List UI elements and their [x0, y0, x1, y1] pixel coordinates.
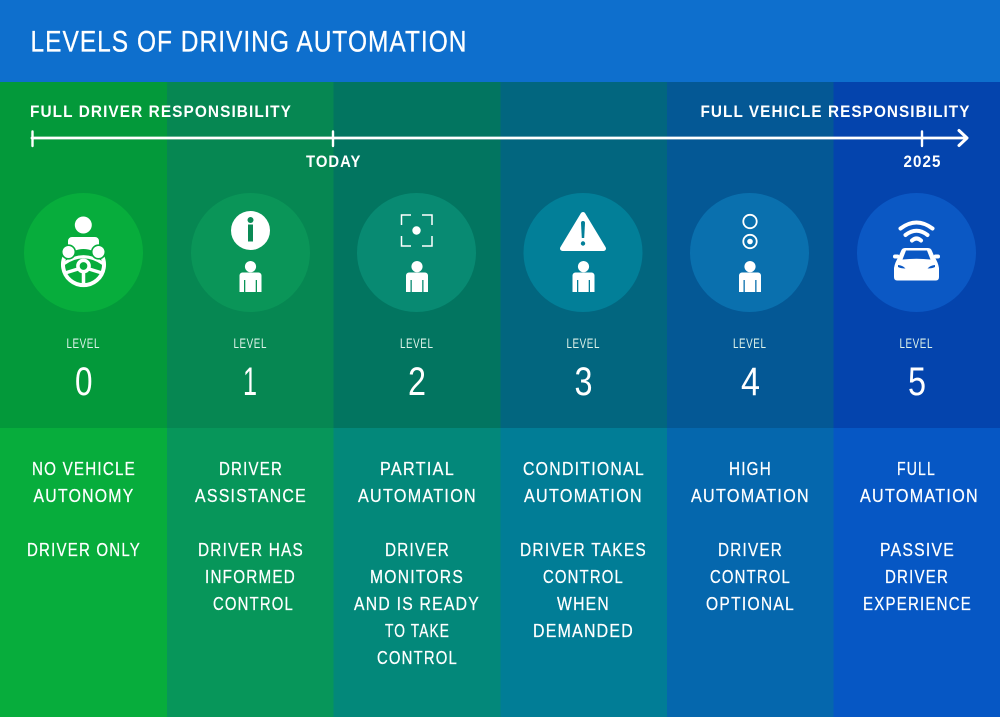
- text: level 3 description: CONTROL: [543, 566, 624, 587]
- icon: status lights and driver: [690, 193, 809, 312]
- text: level 3 description: CONDITIONAL: [523, 458, 645, 479]
- text: level 3 description: WHEN: [557, 593, 610, 614]
- text: number 4: 4: [741, 360, 760, 404]
- text: level 0 description: AUTONOMY: [34, 485, 134, 506]
- panel: level 2: [354, 193, 480, 668]
- text: level 2 description: MONITORS: [370, 566, 464, 587]
- text: level 3 description: AUTOMATION: [524, 485, 643, 506]
- timeline: [30, 103, 970, 171]
- text: level 2 label: LEVEL: [400, 336, 434, 351]
- text: level 2 description: PARTIAL: [380, 458, 455, 479]
- text: level 3 label: LEVEL: [566, 336, 600, 351]
- text: level 2 description: AND IS READY: [354, 593, 480, 614]
- text: level 1 description: DRIVER HAS: [198, 539, 304, 560]
- text: level 3 description: [520, 458, 647, 641]
- text: number 2: 2: [408, 360, 426, 404]
- title: LEVELS OF DRIVING AUTOMATION: [30, 26, 468, 58]
- text: level 2 description: AUTOMATION: [358, 485, 477, 506]
- text: level 4 description: CONTROL: [710, 566, 791, 587]
- text: level 0 description: [27, 458, 141, 560]
- text: number 1: 1: [243, 360, 257, 404]
- panel: level 0: [24, 193, 143, 560]
- text: level 1 description: INFORMED: [205, 566, 296, 587]
- text: level 1 description: CONTROL: [213, 593, 294, 614]
- text: level 2 description: TO TAKE: [385, 620, 450, 641]
- text: level 5 description: FULL: [897, 458, 936, 479]
- text: level 5 description: AUTOMATION: [860, 485, 979, 506]
- text: level 3 description: DRIVER TAKES: [520, 539, 647, 560]
- panel: level 3: [520, 193, 647, 641]
- panel: level 4: [690, 193, 810, 614]
- text: level 0 description: NO VEHICLE: [32, 458, 136, 479]
- text: level 1 description: DRIVER: [219, 458, 283, 479]
- icon: warning triangle and driver: [524, 193, 642, 312]
- icon: connected car: [857, 193, 976, 312]
- text: level 2 description: CONTROL: [377, 647, 458, 668]
- text: level 2 description: DRIVER: [385, 539, 450, 560]
- text: level 4 description: AUTOMATION: [691, 485, 810, 506]
- icon: driver at steering wheel: [24, 193, 143, 312]
- panel: level 1: [191, 193, 310, 614]
- text: level 0 description: DRIVER ONLY: [27, 539, 141, 560]
- label: today: TODAY: [306, 153, 362, 171]
- panel: level 5: [857, 193, 979, 614]
- text: level 5 description: [860, 458, 979, 614]
- text: level 5 label: LEVEL: [900, 336, 933, 351]
- text: level 4 description: OPTIONAL: [706, 593, 795, 614]
- text: level 0 label: LEVEL: [66, 336, 100, 351]
- text: level 1 description: ASSISTANCE: [195, 485, 307, 506]
- text: level 2 description: [354, 458, 480, 668]
- icon: sensing frame and driver: [357, 193, 476, 312]
- text: level 1 description: [195, 458, 307, 614]
- text: level 4 description: [691, 458, 810, 614]
- icon: information and driver: [191, 193, 310, 312]
- arrow: timeline axis: [32, 130, 967, 146]
- text: level 4 description: DRIVER: [718, 539, 783, 560]
- text: level 3 description: DEMANDED: [533, 620, 634, 641]
- label: 2025: 2025: [904, 153, 942, 171]
- heading: full vehicle responsibility: FULL VEHICLE RESPONSIBILITY: [700, 103, 970, 121]
- text: level 5 description: DRIVER: [885, 566, 949, 587]
- text: level 5 description: EXPERIENCE: [863, 593, 972, 614]
- text: number 5: 5: [908, 360, 926, 404]
- text: level 4 label: LEVEL: [733, 336, 766, 351]
- text: number 0: 0: [75, 360, 92, 404]
- text: level 4 description: HIGH: [729, 458, 772, 479]
- text: number 3: 3: [574, 360, 592, 404]
- heading: full driver responsibility: FULL DRIVER RESPONSIBILITY: [30, 103, 292, 121]
- text: level 5 description: PASSIVE: [880, 539, 955, 560]
- header banner: [0, 0, 1000, 82]
- text: level 1 label: LEVEL: [234, 336, 267, 351]
